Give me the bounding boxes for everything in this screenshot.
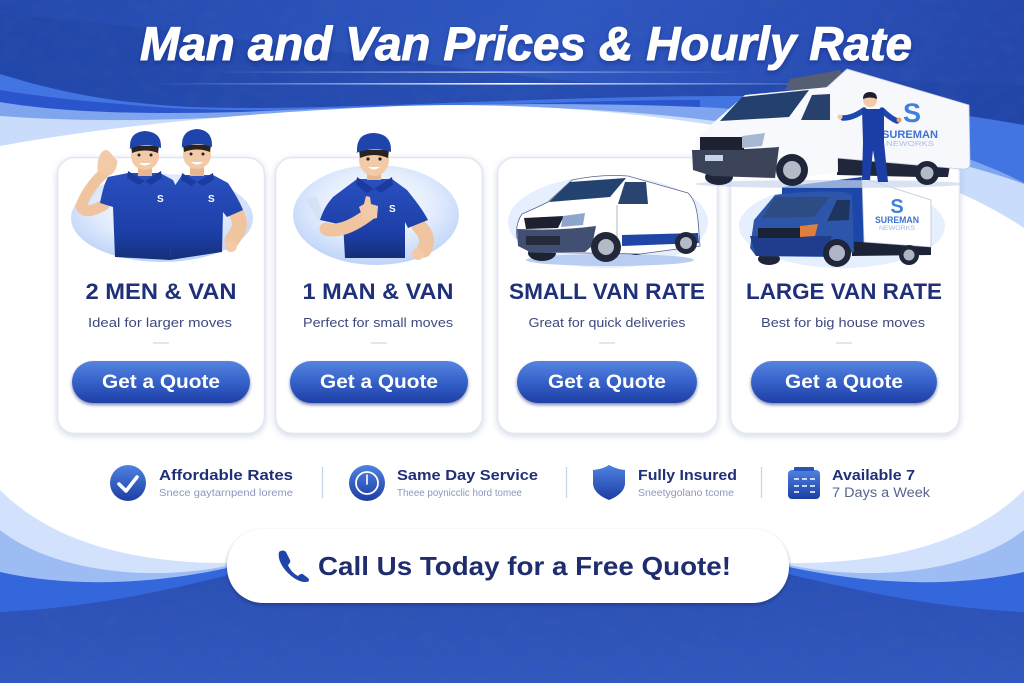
feature description: 7 Days a Week: [832, 485, 930, 500]
illustration oval: [71, 174, 253, 262]
card background: [276, 158, 482, 434]
feature title: Same Day Service: [397, 467, 538, 484]
card background: [58, 158, 264, 434]
illustration oval: [293, 165, 459, 265]
illustration: mover thumbs up: S: [389, 204, 396, 215]
card background: [730, 158, 960, 434]
quote button: [72, 361, 250, 403]
right mover: S: [208, 194, 215, 205]
feature description: Snece gaytarnpend loreme: [159, 488, 293, 499]
icon: calendar: [788, 467, 820, 499]
quote button: Get a Quote: [102, 372, 220, 393]
title underlines: [150, 72, 870, 85]
illustration: large white truck with mover: NEWORKS: [886, 141, 934, 148]
quote button: Get a Quote: [548, 372, 666, 393]
icon: check: [110, 465, 146, 501]
left mover: [81, 131, 185, 260]
icon: phone: [279, 551, 309, 582]
panel: large van rate: [730, 158, 960, 434]
icon: clock: [349, 465, 385, 501]
feature title: Available 7: [832, 467, 915, 484]
quote button: Get a Quote: [320, 372, 438, 393]
mover beside truck: [838, 92, 902, 182]
panel: 2 men and van: [58, 129, 264, 434]
quote button: [290, 361, 468, 403]
quote button: [751, 361, 937, 403]
illustration: blue box van: SUREMAN: [875, 215, 919, 225]
illustration oval: [739, 184, 945, 268]
title: Man and Van Prices & Hourly Rate: [140, 17, 912, 70]
card description: Ideal for larger moves: [88, 316, 232, 330]
illustration: large white truck with mover: S: [903, 98, 921, 128]
feature title: Affordable Rates: [159, 467, 293, 484]
wave layers: top: [0, 74, 1024, 300]
wave layers: bottom: [0, 490, 1024, 612]
left mover: S: [157, 194, 164, 205]
illustration: mover thumbs up: [305, 133, 428, 260]
illustration: large white truck with mover: [692, 69, 970, 188]
feature: fully insured: [593, 465, 737, 500]
card heading: 2 MEN & VAN: [86, 279, 236, 304]
panel: small van rate: [498, 158, 718, 434]
illustration: two movers: [81, 129, 243, 260]
feature description: Theee poynicclic hord tomee: [397, 488, 522, 499]
card heading: SMALL VAN RATE: [509, 279, 705, 304]
illustration oval: [508, 176, 708, 268]
card description: Great for quick deliveries: [528, 316, 686, 330]
features row: [110, 465, 930, 501]
card heading: 1 MAN & VAN: [302, 279, 454, 304]
quote button: [517, 361, 697, 403]
panel: 1 man and van: [276, 133, 482, 434]
illustration: large white truck with mover: SUREMAN: [882, 129, 938, 141]
illustration: blue box van: [750, 177, 931, 267]
white central area: [0, 105, 1024, 563]
call to action pill: [227, 529, 789, 603]
quote button: Get a Quote: [785, 372, 903, 393]
feature: same day service: [349, 465, 538, 501]
feature: affordable rates: [110, 465, 293, 501]
feature: available 7 days: [788, 467, 930, 500]
bottom blue band: [0, 560, 1024, 683]
card description: Best for big house moves: [761, 316, 925, 330]
illustration: blue box van: S: [890, 196, 904, 218]
illustration: small white van: [517, 176, 700, 266]
right mover: [170, 129, 243, 260]
feature title: Fully Insured: [638, 467, 737, 484]
card background: [498, 158, 718, 434]
card description: Perfect for small moves: [303, 316, 453, 330]
card heading: LARGE VAN RATE: [746, 279, 942, 304]
icon: shield: [593, 465, 625, 500]
feature description: Sneetygolano tcome: [638, 488, 734, 499]
top blue header band: [0, 0, 1024, 190]
call to action text: Call Us Today for a Free Quote!: [318, 551, 731, 581]
illustration: blue box van: NEWORKS: [879, 226, 915, 232]
